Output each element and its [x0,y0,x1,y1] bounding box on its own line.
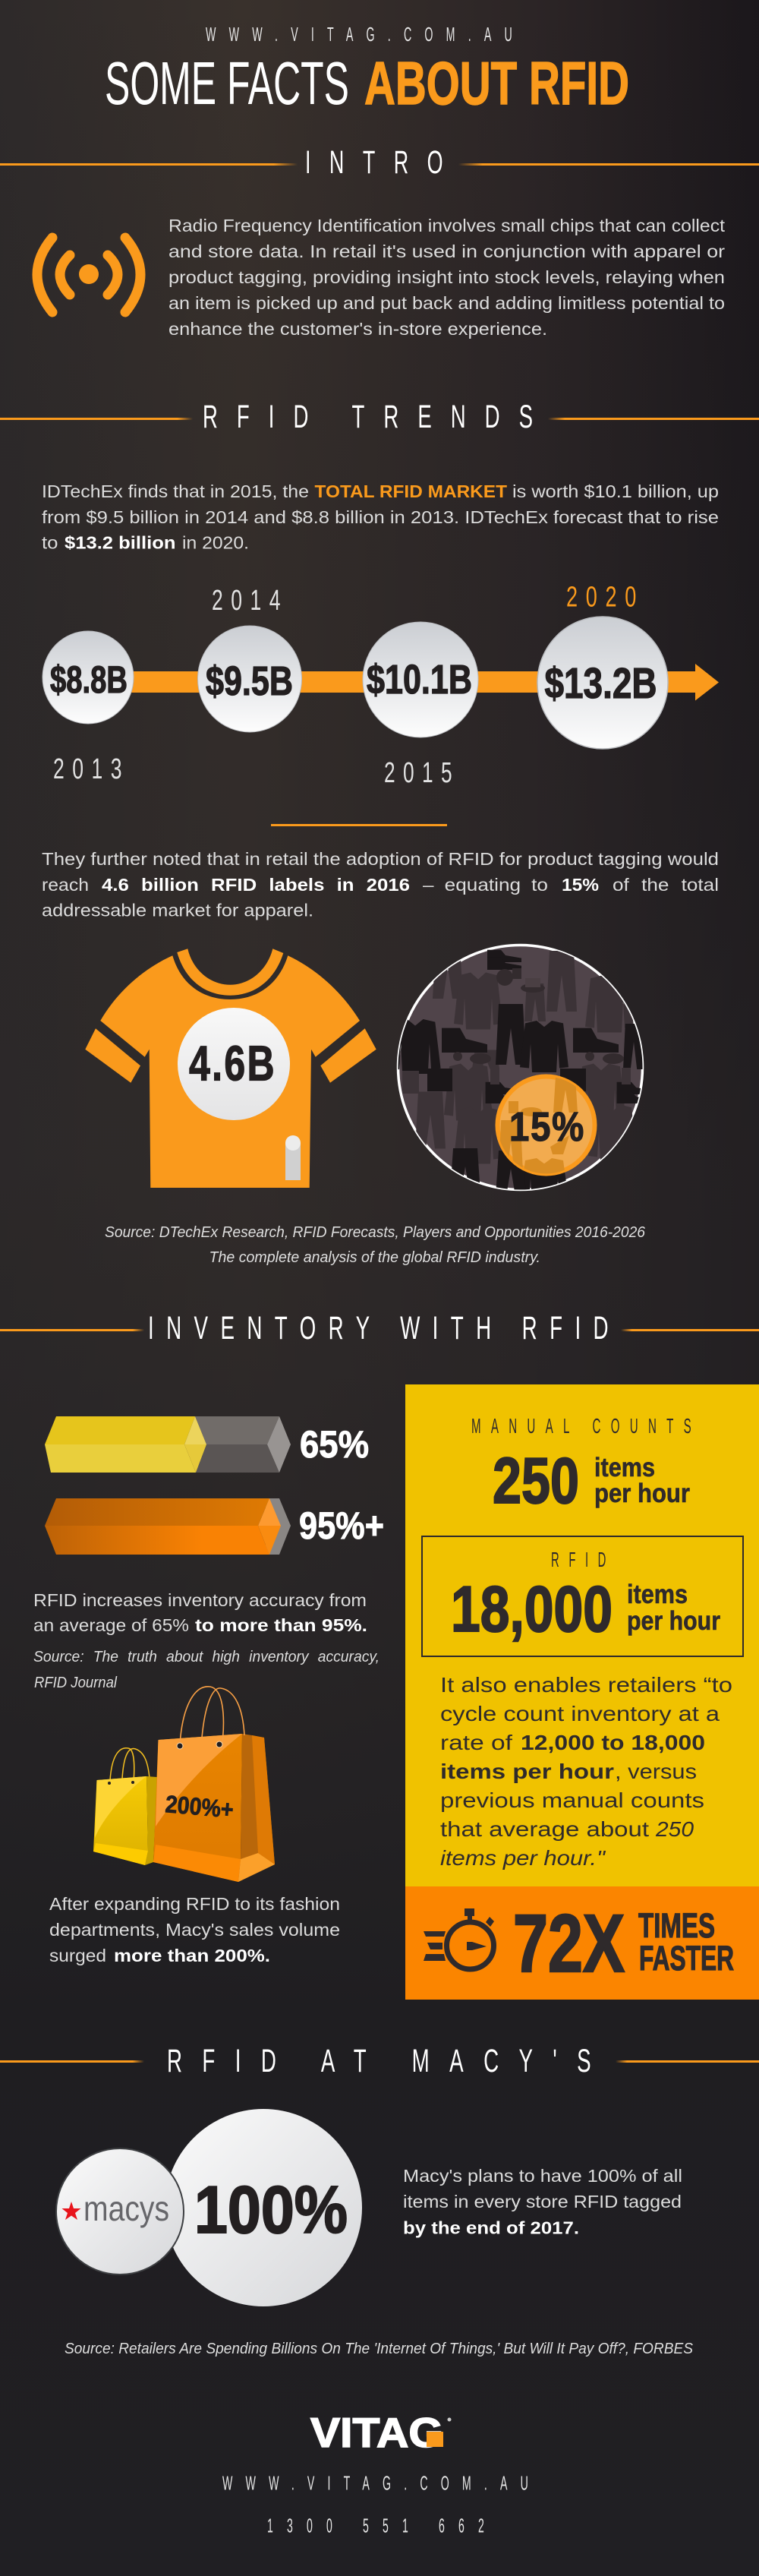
title: SOME FACTS [105,49,349,117]
intro text [168,216,726,339]
retail adoption text [42,849,719,920]
macy's logo circle: macys [83,2189,169,2228]
shopping bags [93,1687,275,1882]
trends text: TOTAL RFID MARKET [314,481,507,501]
timeline arrow [114,664,719,700]
retail adoption text: 15% [562,875,599,895]
panel: 72x times faster [405,1886,759,2000]
rfid counts box: 18,000 [451,1574,613,1646]
accuracy text [33,1590,367,1635]
t-shirt graphic [85,949,376,1188]
retail adoption text: – equating to [423,875,548,895]
macy's sales text [49,1894,340,1965]
heading: intro [0,144,759,181]
rfid counts box: RFID [551,1548,616,1571]
small yellow bag [93,1748,157,1865]
large orange bag [153,1687,275,1882]
timeline: 2020 [537,582,668,749]
trends text: is worth $10.1 billion, up [512,481,719,501]
macy's plan text: items in every store RFID tagged [403,2192,682,2211]
timeline: 2013 [43,631,134,785]
cycle count text: cycle count inventory at a [440,1702,720,1725]
manual counts [471,1414,701,1517]
accuracy source [33,1649,380,1691]
macy's sales text: surged [49,1946,106,1965]
shirt value circle [178,1008,290,1120]
timeline: 2015 [363,622,478,789]
apparel circle [396,943,644,1191]
timeline: 2020: 2020 [566,582,644,614]
macy's plan text: Macy's plans to have 100% of all [403,2166,682,2186]
intro text: enhance the customer's in-store experience. [168,319,547,339]
retail adoption text: of the total [613,875,719,895]
100 percent circle [165,2109,362,2306]
macy's sales text: departments, Macy's sales volume [49,1920,340,1940]
trends text: to [42,533,58,553]
bar: 95 percent plus [45,1498,384,1555]
rfid counts box: items [627,1580,688,1609]
retail adoption text: reach [42,875,89,895]
black clothing [398,949,642,1189]
15 percent badge: 15% [509,1104,585,1150]
accuracy text: an average of 65% [33,1615,189,1635]
grey clothing [415,945,637,1163]
15 percent badge [495,1074,597,1176]
trends text: $13.2 billion [65,533,176,553]
timeline: 2020: $13.2B [545,659,657,708]
retail adoption text: 4.6 billion RFID labels in 2016 [102,875,410,895]
trends source: The complete analysis of the global RFID industry. [209,1249,540,1266]
intro text: Radio Frequency Identification involves small chips that can collect [168,216,726,235]
heading: intro: INTRO [305,144,461,181]
100 percent circle: 100% [194,2172,348,2247]
trends text: from $9.5 billion in 2014 and $8.8 billion in 2013. IDTechEx forecast that to rise [42,507,719,527]
macy's sales text: After expanding RFID to its fashion [49,1894,340,1914]
accuracy text: RFID increases inventory accuracy from [33,1590,367,1610]
intro text: an item is picked up and put back and adding limitless potential to [168,293,725,313]
retail adoption text: addressable market for apparel. [42,901,313,920]
shirt value circle: 4.6B [189,1036,276,1091]
cycle count text: , versus [615,1760,697,1783]
cycle count text: It also enables retailers “to [440,1673,732,1697]
intro text: product tagging, providing insight into stock levels, relaying when [168,267,725,287]
accuracy text: to more than 95%. [195,1615,367,1635]
macy's source: Source: Retailers Are Spending Billions On The 'Internet Of Things,' But Will It Pay Off?, FORBES [65,2341,694,2357]
phone number: 1300 551 662 [267,2514,498,2537]
macy's sales text: more than 200%. [114,1946,270,1965]
macy's logo circle [56,2148,184,2275]
intro text: and store data. In retail it's used in conjunction with apparel or [168,242,725,261]
macy's plan text [403,2166,682,2237]
cycle count text: that average about [440,1817,649,1841]
large orange bag: 200%+ [164,1790,235,1823]
72x label: 72X [513,1897,625,1989]
bar: 65 percent: 65% [300,1423,369,1466]
accuracy source: Source: The truth about high inventory accuracy, [33,1649,380,1665]
trends text [42,481,719,553]
vitag logo: VITAG [310,2409,443,2456]
timeline: 2015: $10.1B [367,657,472,702]
icon: rfid signal [37,238,140,312]
rfid counts box: per hour [627,1606,720,1636]
manual counts: 250 [493,1445,579,1517]
trends text: IDTechEx finds that in 2015, the [42,481,309,501]
trends source: Source: DTechEx Research, RFID Forecasts, Players and Opportunities 2016-2026 [105,1224,646,1241]
manual counts: items [594,1453,655,1482]
timeline: 2015: 2015 [384,757,460,789]
macy's plan text: by the end of 2017. [403,2218,579,2237]
72x label [513,1897,734,1989]
heading: rfid trends: RFID TRENDS [203,399,552,435]
timeline: 2013: 2013 [53,753,130,785]
bar: 65 percent [45,1416,369,1473]
rfid counts box [422,1536,743,1656]
72x label: TIMES [638,1906,715,1945]
cycle count text: 12,000 to 18,000 [521,1731,705,1754]
rfid tag [285,1135,301,1180]
timeline: 2014: 2014 [212,585,288,617]
cycle count text: 250 [655,1817,694,1841]
accuracy source: RFID Journal [34,1675,118,1691]
panel: counts comparison [405,1384,759,1886]
cycle count text [440,1673,732,1870]
retail adoption text: They further noted that in retail the adoption of RFID for product tagging would [42,849,719,869]
timeline: 2014 [197,585,302,732]
cycle count text: items per hour." [440,1846,606,1870]
cycle count text: rate of [440,1731,512,1754]
title: ABOUT RFID [364,49,629,117]
manual counts: per hour [594,1479,690,1508]
timeline: 2013: $8.8B [50,658,128,701]
icon: stopwatch [424,1908,494,1969]
trends source [105,1224,646,1266]
trends text: in 2020. [182,533,249,553]
timeline: 2014: $9.5B [206,658,293,704]
cycle count text: previous manual counts [440,1788,704,1812]
bar: 95 percent plus: 95%+ [299,1504,384,1547]
cycle count text: items per hour [440,1760,614,1783]
accessories [402,968,631,1094]
